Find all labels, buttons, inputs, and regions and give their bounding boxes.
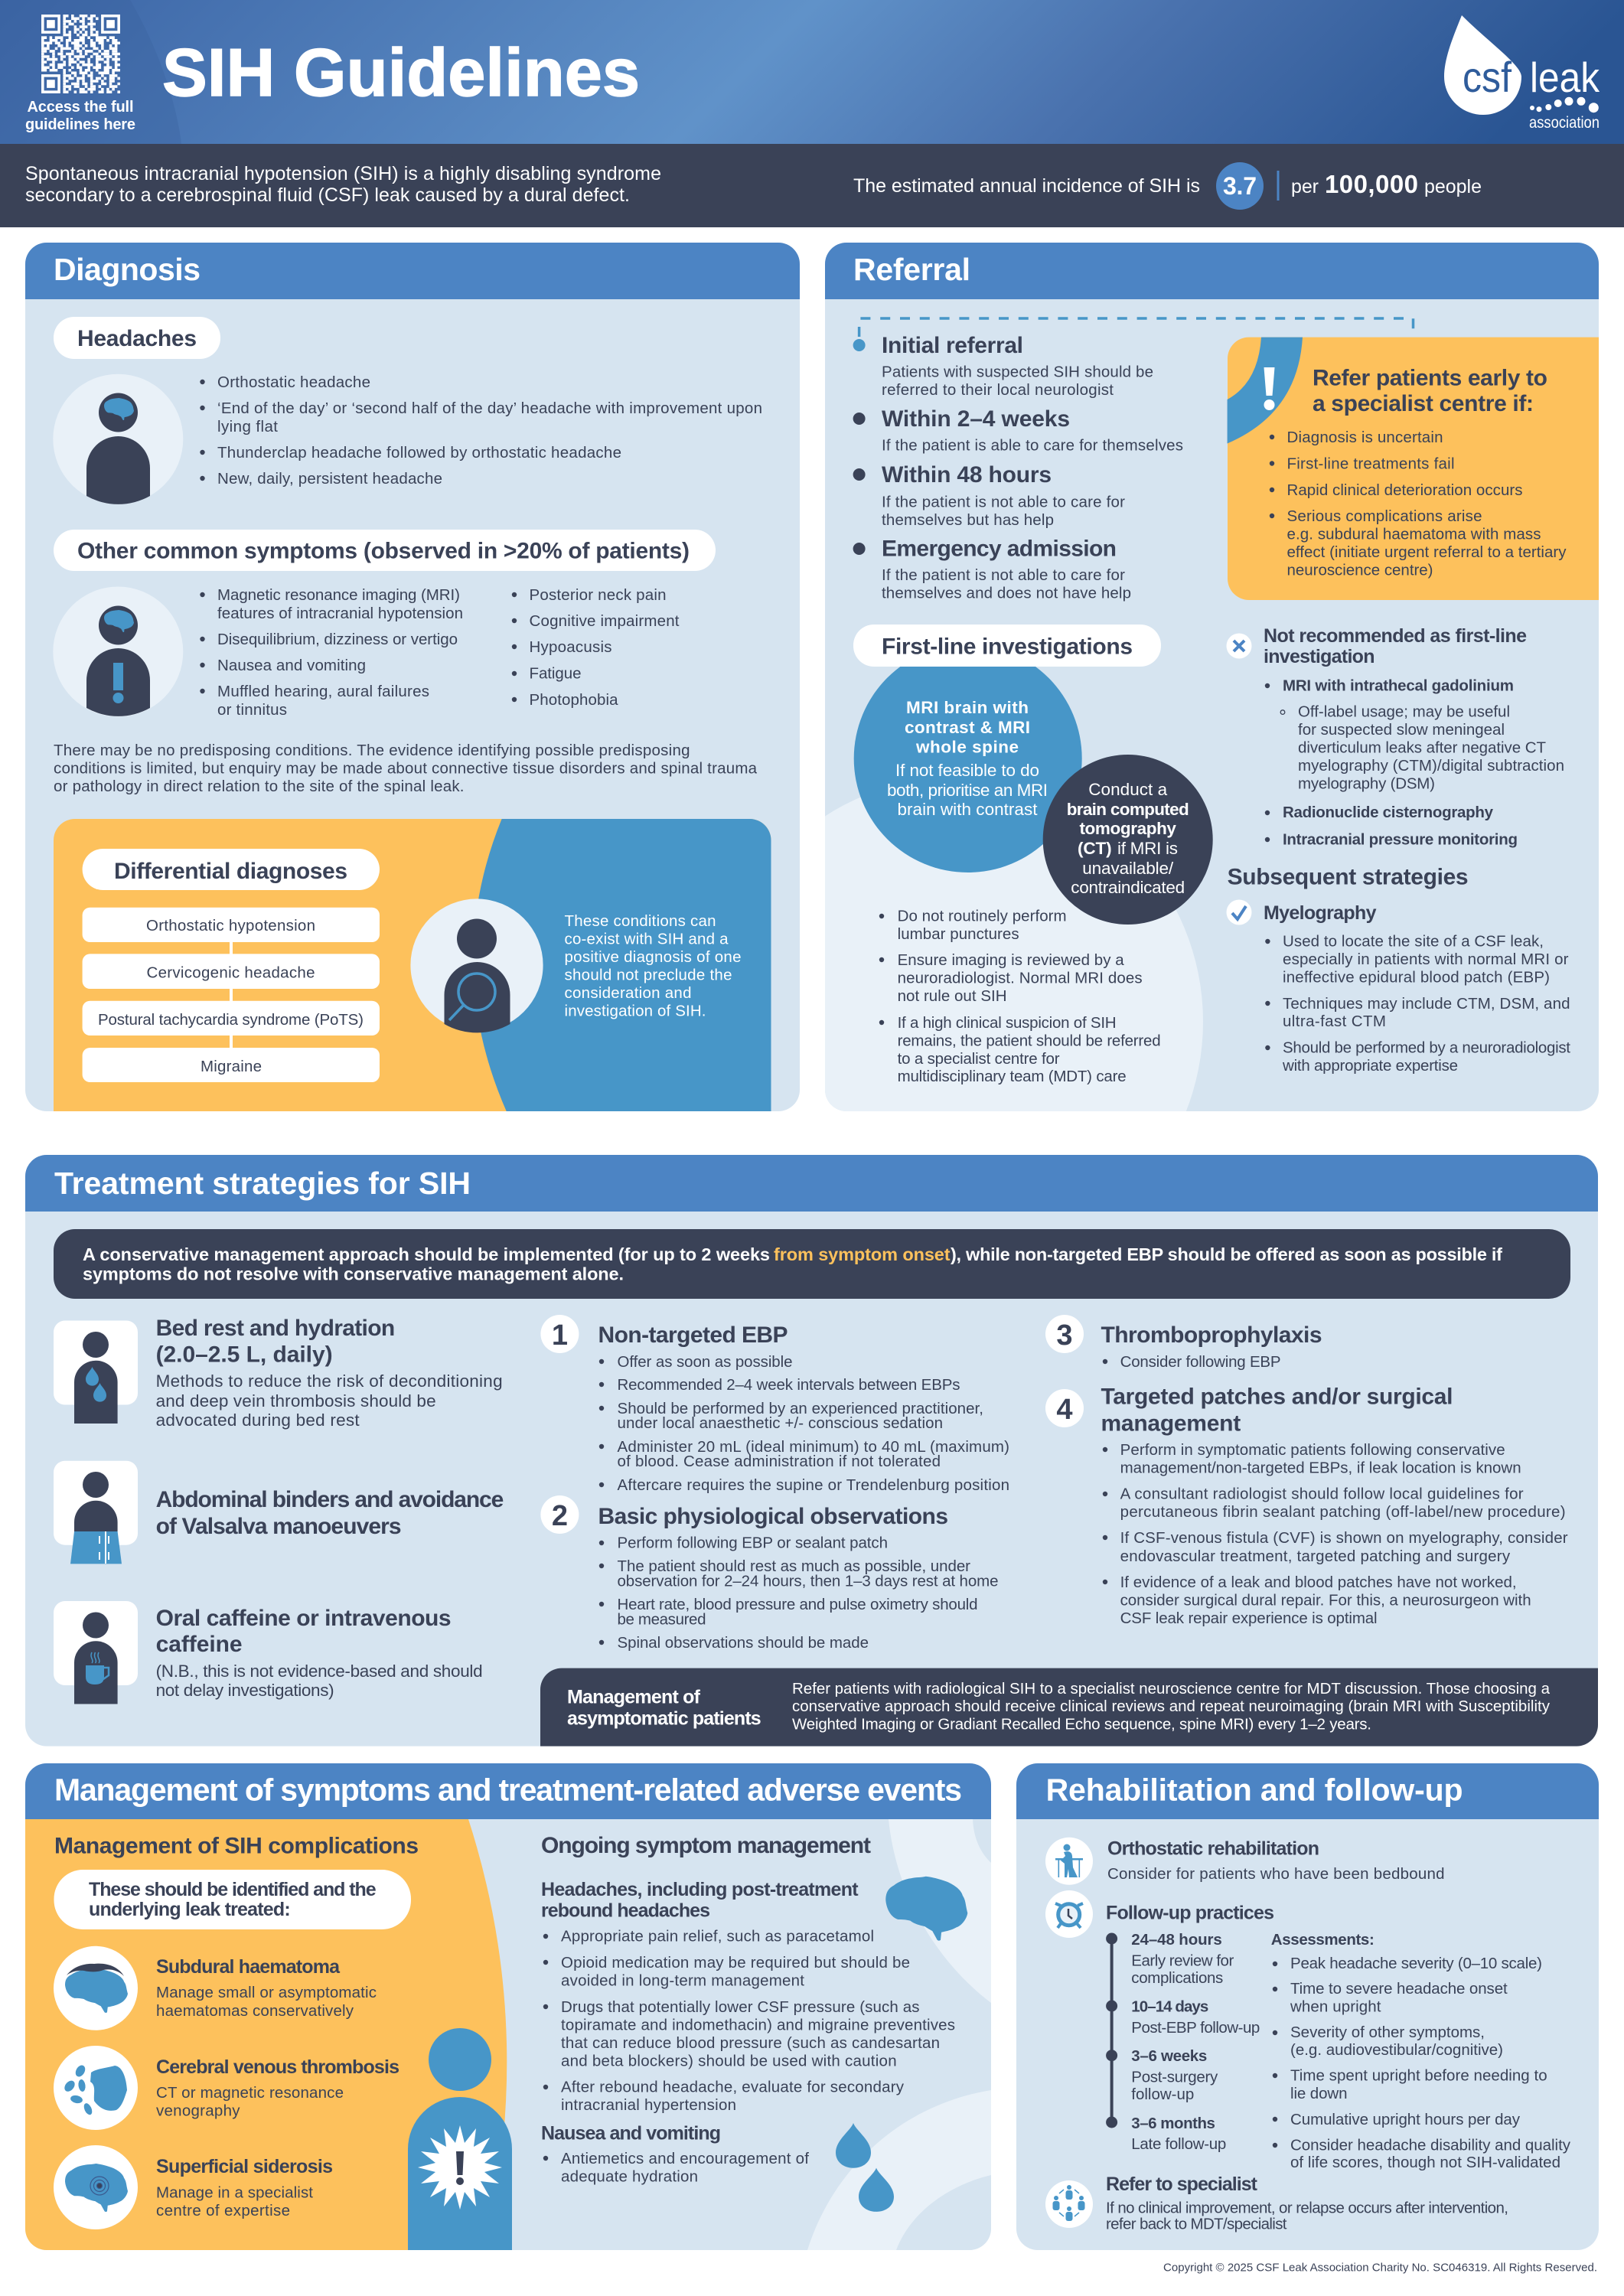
block: ongoing symptom management: Antiemetics and encouragement of: [561, 2150, 809, 2167]
timeline: referral urgency: Initial referral: [882, 333, 1023, 358]
timeline: referral urgency: Within 2–4 weeks: [882, 406, 1070, 432]
incidence statistic: 3.7: [1223, 172, 1257, 200]
block: not recommended: Off-label usage; may be useful: [1298, 703, 1510, 721]
list: differential conditions: Cervicogenic headache: [147, 964, 315, 981]
text: caffeine: (N.B., this is not evidence-based and should: [156, 1662, 483, 1681]
block: ongoing symptom management: rebound headaches: [541, 1900, 710, 1921]
block: ongoing symptom management: and beta blockers) should be used with caution: [561, 2053, 897, 2069]
timeline: follow-up: 24–48 hours: [1131, 1931, 1222, 1949]
timeline: follow-up: Early review for: [1131, 1952, 1234, 1969]
list: assessments: [1271, 1931, 1571, 2171]
list: other symptoms: Hypoacusis: [530, 638, 612, 656]
timeline: follow-up: 10–14 days: [1131, 1998, 1208, 2016]
text: superficial siderosis: [156, 2156, 333, 2219]
timeline: follow-up: Late follow-up: [1131, 2135, 1226, 2153]
bar: asymptomatic patients: Refer patients with radiological SIH to a specialist neuroscience centre for MDT discussion. Those choosing a: [792, 1680, 1551, 1698]
list: headache types: New, daily, persistent headache: [217, 470, 442, 488]
block: not recommended: Not recommended as first-line: [1264, 625, 1527, 647]
block: ongoing symptom management: that can reduce blood pressure (such as candesartan: [561, 2034, 940, 2052]
step 2: basic observations: Basic physiological observations: [598, 1504, 948, 1529]
list: headache types: lying flat: [217, 418, 278, 435]
block: ongoing symptom management: Opioid medication may be required but should be: [561, 1954, 910, 1971]
step 4: targeted patches: 4: [1056, 1394, 1073, 1426]
list: imaging advice: multidisciplinary team (MDT) care: [898, 1068, 1127, 1085]
icon: cross: [1226, 634, 1252, 658]
list: differential conditions: Migraine: [201, 1058, 262, 1075]
MRI circle: If not feasible to do: [895, 761, 1039, 780]
callout list: neuroscience centre): [1287, 562, 1433, 579]
icon: drops: [836, 2123, 894, 2212]
step 1: non-targeted EBP: Should be performed by an experienced practitioner,: [617, 1400, 983, 1417]
pill heading: first-line investigations: [853, 625, 1161, 667]
step 3: thromboprophylaxis: Consider following EBP: [1120, 1353, 1281, 1371]
block: myelography: with appropriate expertise: [1282, 1057, 1458, 1075]
block: not recommended: myelography (CTM)/digital subtraction: [1298, 757, 1564, 775]
timeline: follow-up: Post-surgery: [1131, 2068, 1218, 2086]
CT circle: if MRI is: [1117, 839, 1178, 858]
MRI circle: brain with contrast: [897, 800, 1038, 819]
timeline: referral urgency: Patients with suspected SIH should be: [882, 363, 1153, 380]
list: other symptoms: [200, 586, 680, 719]
list: other symptoms: Photophobia: [530, 691, 618, 709]
incidence statistic: [853, 162, 1482, 210]
block: ongoing symptom management: [541, 1833, 955, 2185]
text: abdominal binders: [156, 1487, 504, 1539]
callout: refer early: [1228, 338, 1599, 600]
list: imaging advice: Do not routinely perform: [898, 908, 1067, 925]
text: superficial siderosis: centre of expertise: [156, 2202, 290, 2219]
list: headache types: Thunderclap headache followed by orthostatic headache: [217, 444, 621, 461]
pill heading: differential diagnoses: [83, 849, 380, 890]
icon: person with coffee: [54, 1601, 138, 1704]
QR caption: [25, 99, 135, 133]
heading: treatment: Treatment strategies for SIH: [54, 1166, 471, 1201]
list: assessments: of life scores, though not SIH-validated: [1290, 2154, 1560, 2171]
incidence statistic: people: [1424, 176, 1482, 197]
list: assessments: Time spent upright before needing to: [1290, 2067, 1547, 2085]
step 1: non-targeted EBP: Non-targeted EBP: [598, 1322, 788, 1348]
list: assessments: when upright: [1290, 1998, 1381, 2016]
step 2: basic observations: Perform following EBP or sealant patch: [617, 1534, 888, 1552]
step 4: targeted patches: If evidence of a leak and blood patches have not worked,: [1120, 1574, 1517, 1591]
block: not recommended: myelography (DSM): [1298, 775, 1435, 793]
CT circle: (CT): [1078, 839, 1112, 858]
header banner: [0, 0, 1624, 144]
logo: CSF Leak Association: leak: [1530, 54, 1600, 101]
text: cerebral venous thrombosis: venography: [156, 2102, 240, 2120]
panel: differential diagnoses: [54, 819, 771, 1111]
callout list: effect (initiate urgent referral to a tertiary: [1287, 543, 1567, 561]
text: coexisting conditions: co-exist with SIH and a: [565, 931, 729, 948]
list: imaging advice: [879, 908, 1161, 1085]
block: not recommended: for suspected slow meningeal: [1298, 721, 1505, 739]
step 2: basic observations: 2: [552, 1500, 568, 1532]
list: other symptoms: Cognitive impairment: [530, 612, 680, 630]
icon: person with drops: [54, 1321, 138, 1424]
bar: asymptomatic patients: asymptomatic patients: [567, 1708, 761, 1730]
panel: management of symptoms: [25, 1763, 991, 2250]
list: imaging advice: lumbar punctures: [898, 925, 1019, 943]
block: not recommended: investigation: [1264, 646, 1375, 667]
step 3: thromboprophylaxis: Thromboprophylaxis: [1101, 1322, 1322, 1348]
heading: subsequent strategies: Subsequent strategies: [1228, 865, 1469, 890]
block: myelography: ineffective epidural blood patch (EBP): [1283, 969, 1550, 987]
step 4: targeted patches: [1045, 1384, 1568, 1627]
callout list: Serious complications arise: [1287, 507, 1482, 525]
intro text: Spontaneous intracranial hypotension (SIH) is a highly disabling syndrome: [25, 163, 661, 184]
list: imaging advice: If a high clinical suspicion of SIH: [898, 1014, 1117, 1032]
banner: conservative management: [54, 1229, 1570, 1299]
block: ongoing symptom management: After rebound headache, evaluate for secondary: [561, 2079, 905, 2095]
text: bed rest: Methods to reduce the risk of deconditioning: [156, 1371, 503, 1391]
bar: asymptomatic patients: Weighted Imaging or Gradiant Recalled Echo sequence, spine MRI) every 1–2 years.: [792, 1716, 1371, 1733]
step 1: non-targeted EBP: Administer 20 mL (ideal minimum) to 40 mL (maximum): [617, 1438, 1009, 1456]
text: abdominal binders: Abdominal binders and avoidance: [156, 1487, 504, 1512]
heading: referral: Referral: [853, 252, 970, 287]
list: other symptoms: Muffled hearing, aural failures: [217, 683, 429, 700]
text: abdominal binders: of Valsalva manoeuvers: [156, 1514, 402, 1539]
block: myelography: Should be performed by a neuroradiologist: [1283, 1039, 1570, 1056]
step 4: targeted patches: Perform in symptomatic patients following conservative: [1120, 1441, 1505, 1459]
intro band: [0, 144, 1624, 227]
text: caffeine: not delay investigations): [156, 1681, 334, 1700]
CT circle: unavailable/: [1082, 859, 1174, 878]
step 2: basic observations: Spinal observations should be made: [617, 1634, 869, 1652]
step 4: targeted patches: management: [1101, 1411, 1241, 1436]
text: coexisting conditions: investigation of SIH.: [565, 1003, 706, 1020]
text: orthostatic rehabilitation: [1107, 1838, 1445, 1883]
intro text: [25, 163, 661, 206]
incidence statistic: The estimated annual incidence of SIH is: [853, 175, 1200, 197]
heading: rehabilitation: Rehabilitation and follow-up: [1046, 1773, 1463, 1808]
list: assessments: Cumulative upright hours per day: [1290, 2111, 1521, 2128]
timeline: referral urgency: If the patient is not able to care for: [882, 493, 1125, 511]
bar: asymptomatic patients: [540, 1668, 1598, 1746]
list: assessments: Time to severe headache onset: [1290, 1980, 1508, 1998]
step 4: targeted patches: Targeted patches and/or surgical: [1101, 1384, 1453, 1410]
pill: identify and treat: [54, 1870, 411, 1929]
block: myelography: Used to locate the site of a CSF leak,: [1283, 933, 1544, 951]
block: myelography: Myelography: [1264, 902, 1377, 924]
text: bed rest: and deep vein thrombosis should be: [156, 1391, 436, 1411]
list: headache types: ‘End of the day’ or ‘second half of the day’ headache with improvement upon: [217, 400, 762, 417]
text: refer to specialist: [1106, 2174, 1508, 2233]
list: imaging advice: to a specialist centre for: [898, 1050, 1060, 1068]
panel: referral: [825, 243, 1599, 1111]
step 1: non-targeted EBP: of blood. Cease administration if not tolerated: [617, 1453, 941, 1470]
MRI circle: whole spine: [915, 738, 1019, 757]
block: ongoing symptom management: Headaches, including post-treatment: [541, 1879, 859, 1900]
MRI circle: MRI brain with: [906, 698, 1029, 717]
timeline: follow-up: follow-up: [1131, 2086, 1194, 2103]
list: imaging advice: not rule out SIH: [898, 987, 1007, 1005]
text: coexisting conditions: These conditions can: [565, 912, 716, 930]
logo: CSF Leak Association: csf: [1463, 53, 1511, 101]
timeline: referral urgency: If the patient is able to care for themselves: [882, 436, 1183, 454]
CT circle: Conduct a: [1088, 780, 1168, 799]
heading: follow-up practices: Follow-up practices: [1106, 1903, 1274, 1924]
list: imaging advice: Ensure imaging is reviewed by a: [898, 951, 1124, 969]
QR code: [41, 15, 120, 93]
block: ongoing symptom management: topiramate and indomethacin) and migraine preventives: [561, 2017, 955, 2034]
block: ongoing symptom management: Appropriate pain relief, such as paracetamol: [561, 1928, 874, 1945]
step 1: non-targeted EBP: Offer as soon as possible: [617, 1353, 793, 1371]
CT circle: brain computed: [1067, 800, 1189, 819]
list: headache types: Orthostatic headache: [217, 373, 370, 391]
text: predisposing conditions: [54, 742, 758, 795]
step 1: non-targeted EBP: Aftercare requires the supine or Trendelenburg position: [617, 1476, 1009, 1494]
timeline: follow-up: complications: [1131, 1969, 1223, 1987]
list: imaging advice: neuroradiologist. Normal MRI does: [898, 970, 1143, 987]
text: subdural haematoma: haematomas conservatively: [156, 2002, 354, 2020]
block: ongoing symptom management: avoided in long-term management: [561, 1972, 804, 1990]
CT circle: tomography: [1079, 819, 1176, 838]
block: ongoing symptom management: Ongoing symptom management: [541, 1833, 871, 1858]
list: assessments: Peak headache severity (0–10 scale): [1290, 1955, 1542, 1972]
pill: identify and treat: underlying leak treated:: [89, 1899, 291, 1920]
list: other symptoms: Posterior neck pain: [530, 586, 666, 604]
icon: large person with burst: [408, 2028, 512, 2250]
timeline: referral urgency: If the patient is not able to care for: [882, 566, 1125, 584]
timeline: referral urgency: Within 48 hours: [882, 462, 1052, 488]
text: predisposing conditions: conditions is limited, but enquiry may be made about connective tissue disorders and spinal trauma: [54, 760, 758, 778]
list: other symptoms: Disequilibrium, dizziness or vertigo: [217, 631, 458, 648]
step 4: targeted patches: endovascular treatment, targeted patching and surgery: [1120, 1548, 1511, 1565]
icon: person with exclamation: [53, 586, 183, 716]
intro text: secondary to a cerebrospinal fluid (CSF) leak caused by a dural defect.: [25, 184, 630, 206]
icon: person with walker: [1045, 1838, 1093, 1885]
incidence statistic: per: [1291, 176, 1319, 197]
callout heading: Refer patients early to: [1313, 366, 1547, 391]
callout list: [1270, 429, 1567, 579]
step 1: non-targeted EBP: Recommended 2–4 week intervals between EBPs: [617, 1376, 960, 1394]
text: cerebral venous thrombosis: CT or magnetic resonance: [156, 2084, 344, 2102]
dashed connector arrow: [859, 318, 1413, 338]
text: refer to specialist: Refer to specialist: [1106, 2174, 1258, 2195]
CT circle: contraindicated: [1071, 878, 1185, 897]
text: predisposing conditions: There may be no predisposing conditions. The evidence identifying possible predisposing: [54, 742, 690, 759]
panel: diagnosis: [25, 243, 800, 1111]
block: myelography: especially in patients with normal MRI or: [1283, 951, 1569, 968]
list: differential conditions: Postural tachycardia syndrome (PoTS): [98, 1011, 364, 1029]
callout heading: [1313, 366, 1547, 416]
text: coexisting conditions: positive diagnosis of one: [565, 948, 741, 966]
panel: rehabilitation and follow-up: [1016, 1763, 1599, 2250]
step 3: thromboprophylaxis: 3: [1056, 1319, 1073, 1352]
banner: conservative management: from symptom onset: [774, 1244, 951, 1264]
MRI circle: both, prioritise an MRI: [887, 781, 1048, 800]
timeline: referral urgency: referred to their local neurologist: [882, 381, 1114, 399]
step 2: basic observations: be measured: [617, 1610, 706, 1628]
text: refer to specialist: refer back to MDT/specialist: [1106, 2215, 1287, 2233]
timeline: follow-up: Post-EBP follow-up: [1131, 2019, 1260, 2037]
pill heading: differential diagnoses: Differential diagnoses: [114, 859, 347, 884]
block: not recommended: Intracranial pressure monitoring: [1283, 831, 1518, 849]
text: orthostatic rehabilitation: Orthostatic rehabilitation: [1107, 1838, 1319, 1860]
text: subdural haematoma: Subdural haematoma: [156, 1956, 341, 1978]
logo: CSF Leak Association: [1444, 15, 1600, 132]
banner: conservative management: A conservative management approach should be implemented (for up to 2 weeks: [83, 1244, 770, 1264]
callout list: Rapid clinical deterioration occurs: [1287, 481, 1523, 499]
text: coexisting conditions: consideration and: [565, 984, 692, 1002]
timeline: referral urgency: [853, 333, 1183, 602]
CT circle: [1043, 755, 1213, 925]
list: assessments: Consider headache disability and quality: [1290, 2136, 1571, 2154]
list: assessments: Severity of other symptoms,: [1290, 2024, 1485, 2041]
copyright: Copyright © 2025 CSF Leak Association Charity No. SC046319. All Rights Reserved.: [1163, 2261, 1597, 2274]
MRI circle: [854, 644, 1082, 872]
text: bed rest: (2.0–2.5 L, daily): [156, 1342, 333, 1368]
block: myelography: ultra-fast CTM: [1283, 1013, 1386, 1030]
text: coexisting conditions: [565, 912, 741, 1020]
text: cerebral venous thrombosis: [156, 2056, 399, 2120]
icon: person with magnifier: [410, 899, 543, 1032]
list: assessments: Assessments:: [1271, 1931, 1375, 1949]
icon: exclamation: [1264, 367, 1275, 410]
QR caption: Access the full: [28, 99, 133, 116]
text: cerebral venous thrombosis: Cerebral venous thrombosis: [156, 2056, 399, 2078]
pill heading: headaches: [54, 317, 220, 359]
block: myelography: [1264, 902, 1570, 1075]
step 3: thromboprophylaxis: [1045, 1315, 1322, 1371]
list: other symptoms: Magnetic resonance imaging (MRI): [217, 586, 460, 604]
text: coexisting conditions: should not preclude the: [565, 967, 732, 984]
list: other symptoms: Nausea and vomiting: [217, 657, 366, 674]
icon: check: [1226, 900, 1252, 925]
step 4: targeted patches: percutaneous fibrin sealant patching (off-label/new procedure): [1120, 1503, 1566, 1521]
callout list: First-line treatments fail: [1287, 455, 1454, 473]
list: headache types: [200, 373, 762, 488]
banner: conservative management: ), while non-targeted EBP should be offered as soon as possible if: [951, 1244, 1502, 1264]
text: caffeine: [156, 1606, 483, 1700]
list: differential conditions: Orthostatic hypotension: [146, 917, 315, 934]
timeline: follow-up: 3–6 months: [1131, 2115, 1215, 2132]
QR caption: guidelines here: [25, 116, 135, 133]
text: orthostatic rehabilitation: Consider for patients who have been bedbound: [1107, 1865, 1445, 1883]
text: predisposing conditions: or pathology in direct relation to the site of the spinal leak.: [54, 778, 464, 795]
text: bed rest: advocated during bed rest: [156, 1411, 360, 1430]
pill heading: other symptoms: Other common symptoms (observed in >20% of patients): [77, 539, 690, 564]
MRI circle: contrast & MRI: [905, 718, 1030, 737]
title: SIH Guidelines: [162, 34, 640, 110]
list: imaging advice: remains, the patient should be referred: [898, 1032, 1161, 1050]
icon: cerebral venous thrombosis: [54, 2046, 138, 2130]
block: not recommended: [1264, 625, 1564, 849]
timeline: follow-up: [1106, 1931, 1260, 2153]
text: caffeine: caffeine: [156, 1632, 243, 1657]
step 4: targeted patches: CSF leak repair experience is optimal: [1120, 1609, 1378, 1627]
text: subdural haematoma: Manage small or asymptomatic: [156, 1984, 377, 2001]
step 4: targeted patches: A consultant radiologist should follow local guidelines for: [1120, 1486, 1524, 1503]
block: not recommended: diverticulum leaks after negative CT: [1298, 739, 1546, 757]
list: assessments: lie down: [1290, 2085, 1347, 2102]
block: ongoing symptom management: adequate hydration: [561, 2167, 698, 2185]
heading: SIH complications: Management of SIH complications: [54, 1833, 419, 1858]
block: ongoing symptom management: intracranial hypertension: [561, 2096, 736, 2114]
step 2: basic observations: The patient should rest as much as possible, under: [617, 1557, 970, 1575]
icon: subdural haematoma: [54, 1946, 138, 2030]
block: myelography: Techniques may include CTM, DSM, and: [1283, 995, 1570, 1013]
heading: diagnosis: Diagnosis: [54, 252, 201, 287]
icon: person with brain: [53, 374, 183, 504]
icon: person with abdominal binder: [54, 1461, 138, 1564]
pill heading: other symptoms: [54, 530, 716, 571]
logo: CSF Leak Association: association: [1529, 114, 1600, 132]
icon: multidisciplinary team: [1045, 2180, 1093, 2228]
bar: asymptomatic patients: conservative approach should receive clinical reviews and repeat neuroimaging (brain MRI with Susceptibility: [792, 1698, 1551, 1715]
callout heading: a specialist centre if:: [1313, 391, 1534, 416]
text: bed rest: Bed rest and hydration: [156, 1316, 395, 1341]
icon: alarm clock: [1045, 1890, 1093, 1938]
timeline: referral urgency: themselves and does not have help: [882, 585, 1131, 602]
text: refer to specialist: If no clinical improvement, or relapse occurs after intervention,: [1106, 2200, 1508, 2216]
step 1: non-targeted EBP: under local anaesthetic +/- conscious sedation: [617, 1414, 943, 1432]
callout list: e.g. subdural haematoma with mass: [1287, 525, 1541, 543]
pill heading: headaches: Headaches: [77, 326, 197, 351]
bar: asymptomatic patients: Management of: [567, 1687, 701, 1708]
panel: treatment strategies: [25, 1155, 1598, 1746]
step 2: basic observations: observation for 2–24 hours, then 1–3 days rest at home: [617, 1572, 998, 1590]
block: not recommended: Radionuclide cisternography: [1283, 804, 1494, 821]
incidence statistic: 100,000: [1325, 170, 1418, 198]
icon: superficial siderosis: [54, 2145, 138, 2229]
text: bed rest: [156, 1316, 503, 1430]
step 4: targeted patches: consider surgical dural repair. For this, a neurosurgeon with: [1120, 1591, 1531, 1609]
text: subdural haematoma: [156, 1956, 377, 2020]
step 2: basic observations: [540, 1495, 998, 1652]
timeline: referral urgency: Emergency admission: [882, 536, 1117, 562]
step 1: non-targeted EBP: 1: [552, 1319, 568, 1352]
heading: management: Management of symptoms and treatment-related adverse events: [54, 1773, 962, 1808]
pill heading: first-line investigations: First-line investigations: [882, 634, 1133, 660]
banner: conservative management: symptoms do not resolve with conservative management alone.: [83, 1264, 624, 1283]
step 2: basic observations: Heart rate, blood pressure and pulse oximetry should: [617, 1596, 978, 1613]
list: assessments: (e.g. audiovestibular/cognitive): [1290, 2041, 1503, 2059]
icon: brain: [885, 1877, 967, 1941]
block: ongoing symptom management: Drugs that potentially lower CSF pressure (such as: [561, 1998, 920, 2016]
step 4: targeted patches: If CSF-venous fistula (CVF) is shown on myelography, consider: [1120, 1529, 1568, 1547]
block: not recommended: MRI with intrathecal gadolinium: [1283, 677, 1514, 695]
callout list: Diagnosis is uncertain: [1287, 429, 1443, 446]
pill: identify and treat: These should be identified and the: [89, 1879, 377, 1900]
list: other symptoms: or tinnitus: [217, 701, 287, 719]
timeline: follow-up: 3–6 weeks: [1131, 2047, 1207, 2065]
text: caffeine: Oral caffeine or intravenous: [156, 1606, 452, 1631]
step 1: non-targeted EBP: [540, 1315, 1009, 1494]
step 4: targeted patches: management/non-targeted EBPs, if leak location is known: [1120, 1459, 1521, 1477]
text: superficial siderosis: Superficial siderosis: [156, 2156, 333, 2177]
text: superficial siderosis: Manage in a specialist: [156, 2183, 313, 2201]
list: other symptoms: features of intracranial hypotension: [217, 605, 463, 622]
list: other symptoms: Fatigue: [530, 665, 582, 683]
block: ongoing symptom management: Nausea and vomiting: [541, 2123, 721, 2144]
timeline: referral urgency: themselves but has help: [882, 511, 1054, 529]
list: differential conditions: [83, 908, 380, 1082]
